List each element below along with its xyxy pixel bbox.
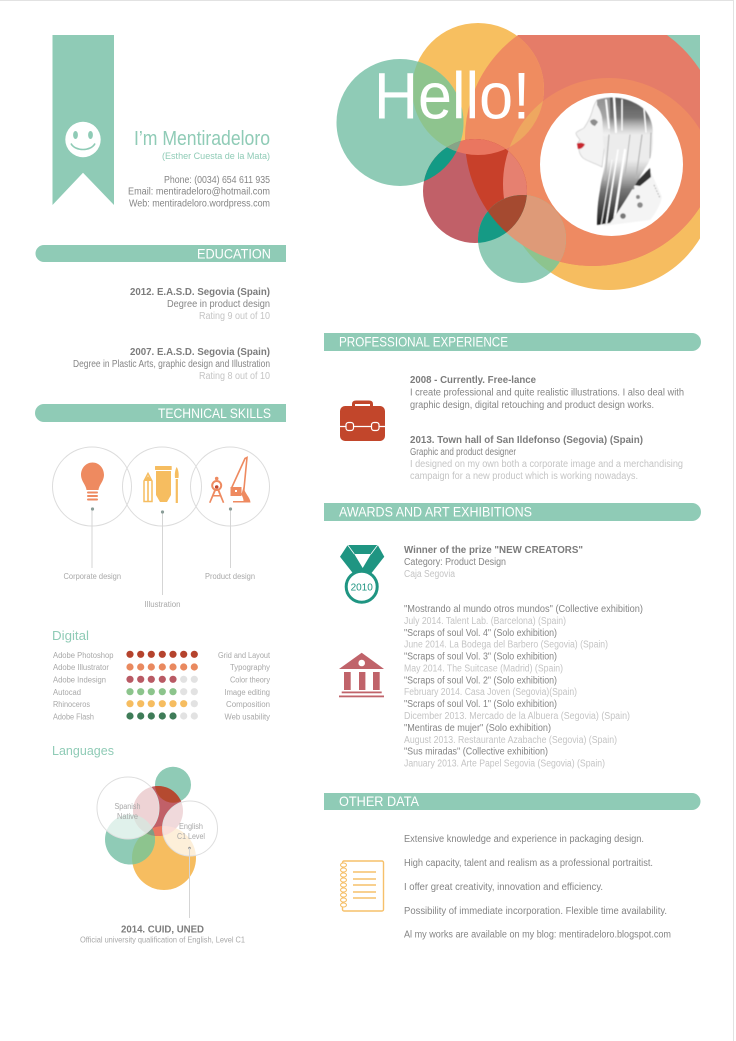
other data text: Extensive knowledge and experience in packaging design.	[404, 834, 644, 845]
exhibitions list	[404, 604, 643, 770]
exhibitions list: "Sus miradas" (Collective exhibition)	[404, 746, 548, 758]
portrait	[540, 90, 683, 236]
digital skill labels right: Typography	[230, 663, 270, 672]
digital skill labels right: Grid and Layout	[218, 651, 271, 660]
exhibitions list: Dicember 2013. Mercado de la Albuera (Segovia) (Spain)	[404, 711, 630, 722]
digital skill labels left: Autocad	[53, 688, 81, 697]
digital skill labels right: Image editing	[224, 688, 270, 697]
other data text: Possibility of immediate incorporation. Flexible time availability.	[404, 906, 667, 917]
experience text: campaign for a new product which is working nowadays.	[410, 471, 638, 482]
ribbon with smiley	[52, 35, 114, 205]
hero circles	[336, 11, 720, 290]
band: education	[36, 245, 286, 262]
name and contact	[128, 128, 270, 210]
name and contact: I’m Mentiradeloro	[134, 128, 270, 150]
exhibitions list: "Scraps of soul Vol. 3" (Solo exhibition)	[404, 652, 557, 662]
band: technical skills	[35, 404, 286, 422]
skill circles	[52, 447, 270, 595]
name and contact: Phone: (0034) 654 611 935	[164, 175, 270, 186]
language labels: English	[179, 822, 203, 831]
education entries: Degree in Plastic Arts, graphic design and Illustration	[73, 359, 270, 370]
digital skill labels right: Web usability	[224, 712, 270, 722]
education entries: Degree in product design	[167, 299, 270, 310]
award text: Winner of the prize "NEW CREATORS"	[404, 544, 583, 556]
language qualification	[80, 924, 246, 944]
education entries: 2012. E.A.S.D. Segovia (Spain)	[130, 286, 270, 298]
language labels: Native	[117, 812, 138, 821]
digital skill labels right: Color theory	[230, 676, 270, 684]
heading: languages: Languages	[52, 743, 114, 758]
digital skill labels left: Adobe Photoshop	[53, 651, 114, 660]
exhibitions list: July 2014. Talent Lab. (Barcelona) (Spain)	[404, 616, 566, 627]
name and contact: Email: mentiradeloro@hotmail.com	[128, 186, 270, 198]
education entries: Rating 8 out of 10	[199, 371, 270, 382]
skill labels: Illustration	[144, 600, 180, 609]
language qualification: 2014. CUID, UNED	[121, 924, 204, 936]
icon: smiley	[65, 122, 101, 157]
experience text: 2013. Town hall of San Ildefonso (Segovia) (Spain)	[410, 434, 643, 446]
band: awards: AWARDS AND ART EXHIBITIONS	[339, 504, 532, 520]
band: awards	[324, 503, 701, 521]
education entries	[73, 286, 270, 382]
exhibitions list: "Scraps of soul Vol. 1" (Solo exhibition)	[404, 699, 557, 710]
other data text: Al my works are available on my blog: mentiradeloro.blogspot.com	[404, 930, 671, 940]
band: other data	[324, 793, 700, 810]
exhibitions list: June 2014. La Bodega del Barbero (Segovia) (Spain)	[404, 640, 608, 650]
award text	[404, 544, 583, 580]
icon: briefcase	[340, 400, 385, 441]
icon: notebook	[340, 861, 384, 911]
digital skill labels right: Composition	[226, 700, 270, 709]
icon: light bulb	[81, 462, 104, 500]
icon: museum	[339, 653, 384, 697]
other data text	[404, 834, 671, 940]
award text: Caja Segovia	[404, 569, 455, 580]
exhibitions list: "Mostrando al mundo otros mundos" (Collective exhibition)	[404, 604, 643, 615]
language labels: C1 Level	[177, 832, 205, 841]
experience text: Graphic and product designer	[410, 447, 517, 458]
heading: digital: Digital	[52, 628, 89, 643]
icon: medal	[340, 545, 384, 602]
digital skill labels left: Adobe Indesign	[53, 676, 106, 684]
experience text: graphic design, digital retouching and product design works.	[410, 400, 654, 411]
education entries: Rating 9 out of 10	[199, 311, 270, 322]
experience text: I create professional and quite realistic illustrations. I also deal with	[410, 388, 684, 398]
language labels: Spanish	[114, 802, 140, 811]
exhibitions list: August 2013. Restaurante Azabache (Segovia) (Spain)	[404, 735, 617, 746]
exhibitions list: "Scraps of soul Vol. 4" (Solo exhibition)	[404, 628, 557, 639]
icon: illustration tools	[144, 466, 179, 503]
icon: product design tools	[209, 458, 250, 503]
digital skill labels right	[218, 651, 271, 722]
skill labels	[64, 572, 255, 609]
exhibitions list: January 2013. Arte Papel Segovia (Segovia) (Spain)	[404, 758, 605, 770]
icon: medal: 2010	[351, 582, 373, 594]
digital skill labels left	[53, 651, 114, 722]
digital skill labels left: Adobe Flash	[53, 712, 94, 722]
experience text: 2008 - Currently. Free-lance	[410, 374, 536, 386]
experience text	[410, 374, 684, 482]
language qualification: Official university qualification of English, Level C1	[80, 936, 246, 944]
skill labels: Corporate design	[64, 572, 121, 581]
exhibitions list: May 2014. The Suitcase (Madrid) (Spain)	[404, 664, 563, 674]
digital skill ratings	[126, 651, 198, 720]
band: other data: OTHER DATA	[339, 793, 420, 809]
band: technical skills: TECHNICAL SKILLS	[158, 405, 271, 421]
skill labels: Product design	[205, 572, 255, 581]
other data text: I offer great creativity, innovation and efficiency.	[404, 882, 603, 893]
band: professional experience	[324, 333, 701, 351]
other data text: High capacity, talent and realism as a professional portraitist.	[404, 858, 653, 869]
name and contact: (Esther Cuesta de la Mata)	[162, 151, 270, 162]
band: professional experience: PROFESSIONAL EXPERIENCE	[339, 334, 508, 350]
exhibitions list: February 2014. Casa Joven (Segovia)(Spain)	[404, 687, 577, 698]
digital skill labels left: Adobe Illustrator	[53, 663, 109, 672]
digital skill labels left: Rhinoceros	[53, 700, 90, 709]
award text: Category: Product Design	[404, 557, 506, 568]
name and contact: Web: mentiradeloro.wordpress.com	[129, 198, 270, 210]
languages venn	[97, 767, 218, 918]
band: education: EDUCATION	[197, 246, 271, 262]
experience text: I designed on my own both a corporate image and a merchandising	[410, 459, 683, 470]
education entries: 2007. E.A.S.D. Segovia (Spain)	[130, 346, 270, 358]
language labels	[114, 802, 205, 841]
title: Hello!: Hello!	[374, 58, 530, 132]
exhibitions list: "Mentiras de mujer" (Solo exhibition)	[404, 723, 551, 734]
exhibitions list: "Scraps of soul Vol. 2" (Solo exhibition)	[404, 676, 557, 686]
